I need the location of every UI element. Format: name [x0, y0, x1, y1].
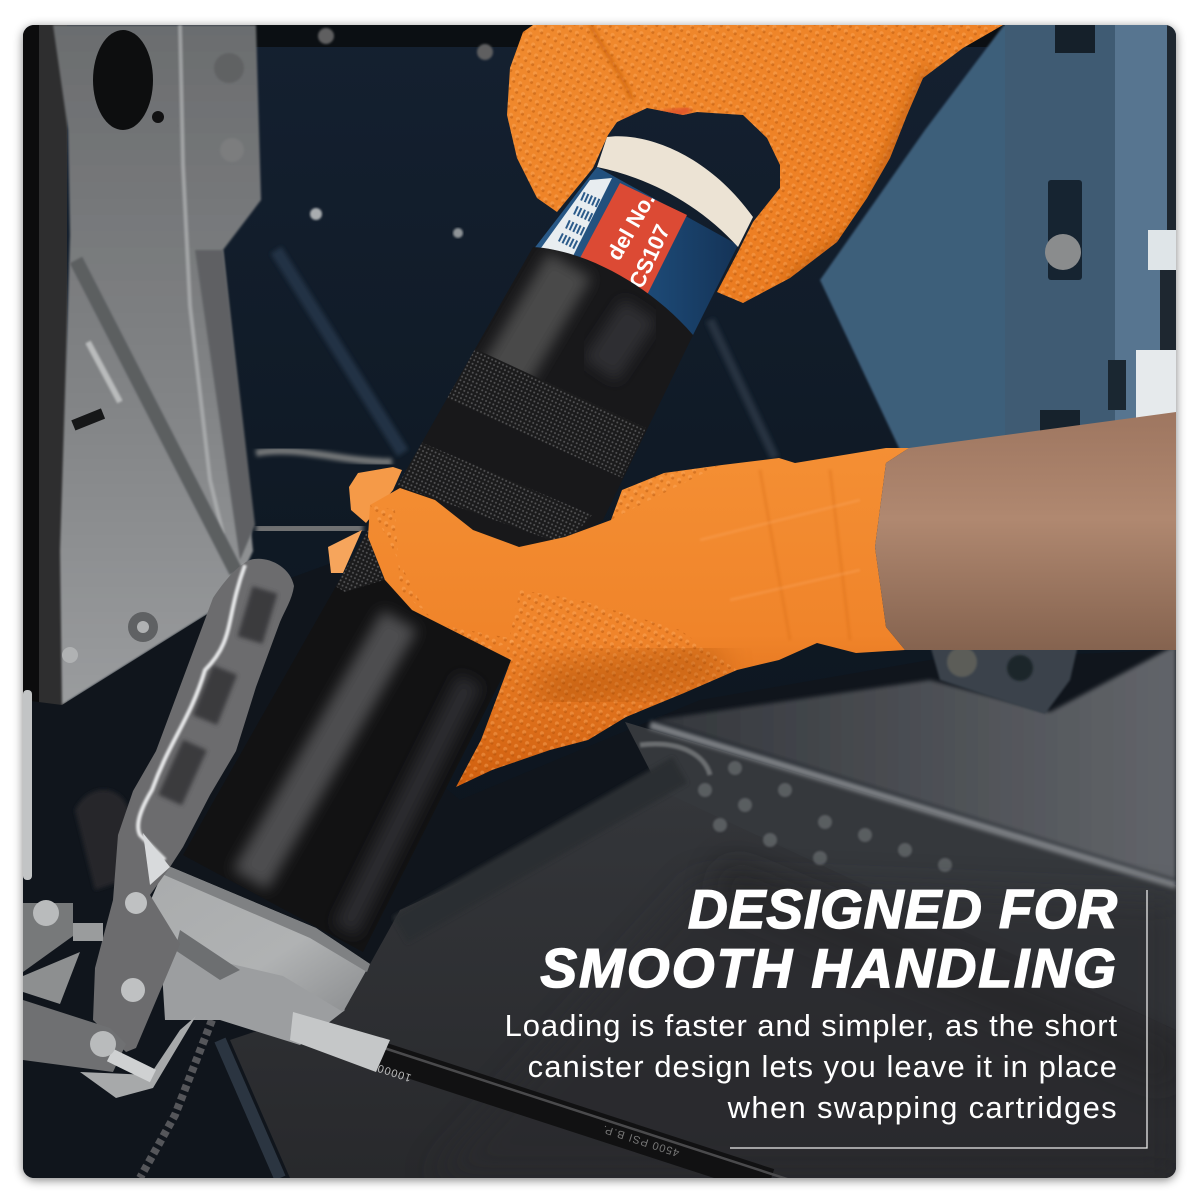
linkage [23, 900, 196, 1098]
cartridge label: del No. [602, 188, 660, 264]
dark lower background [23, 560, 1176, 1178]
caption [505, 878, 1118, 1125]
wheel edge [23, 690, 32, 880]
cartridge lid [597, 136, 753, 247]
body text: canister design lets you leave it in place [528, 1049, 1118, 1084]
blue cabinet, right [820, 25, 1176, 450]
cartridge [533, 136, 753, 335]
frame lines [730, 890, 1147, 1148]
heading: SMOOTH HANDLING [540, 937, 1118, 999]
fingertips behind tube [328, 467, 402, 573]
bottom left chain and strut [140, 1020, 212, 1178]
text backing [944, 912, 1155, 921]
bottom glove [368, 448, 909, 790]
lower table and floor [625, 722, 1176, 1060]
galvanised plate, left [23, 25, 261, 705]
body text: Loading is faster and simpler, as the short [505, 1008, 1118, 1043]
hose: 10000 [375, 1061, 413, 1084]
body text [505, 1008, 1118, 1125]
cartridge label [610, 198, 668, 287]
grease gun barrel [183, 530, 511, 952]
left bracket behind lever [75, 790, 130, 890]
hose [375, 1048, 790, 1182]
tube sleeve [395, 247, 693, 570]
table top [655, 645, 1176, 880]
heading: DESIGNED FOR [688, 878, 1118, 940]
bracket behind arm [930, 645, 1078, 714]
hose: 4500 PSI B.P. [600, 1122, 681, 1159]
body text: when swapping cartridges [728, 1090, 1118, 1125]
lever handle [93, 559, 294, 1052]
grease gun head [146, 865, 390, 1072]
perforated rail dots [698, 761, 952, 872]
forearm [875, 412, 1176, 650]
top glove [500, 25, 1010, 305]
cartridge label: CS107 [624, 221, 675, 292]
heading [540, 878, 1118, 999]
